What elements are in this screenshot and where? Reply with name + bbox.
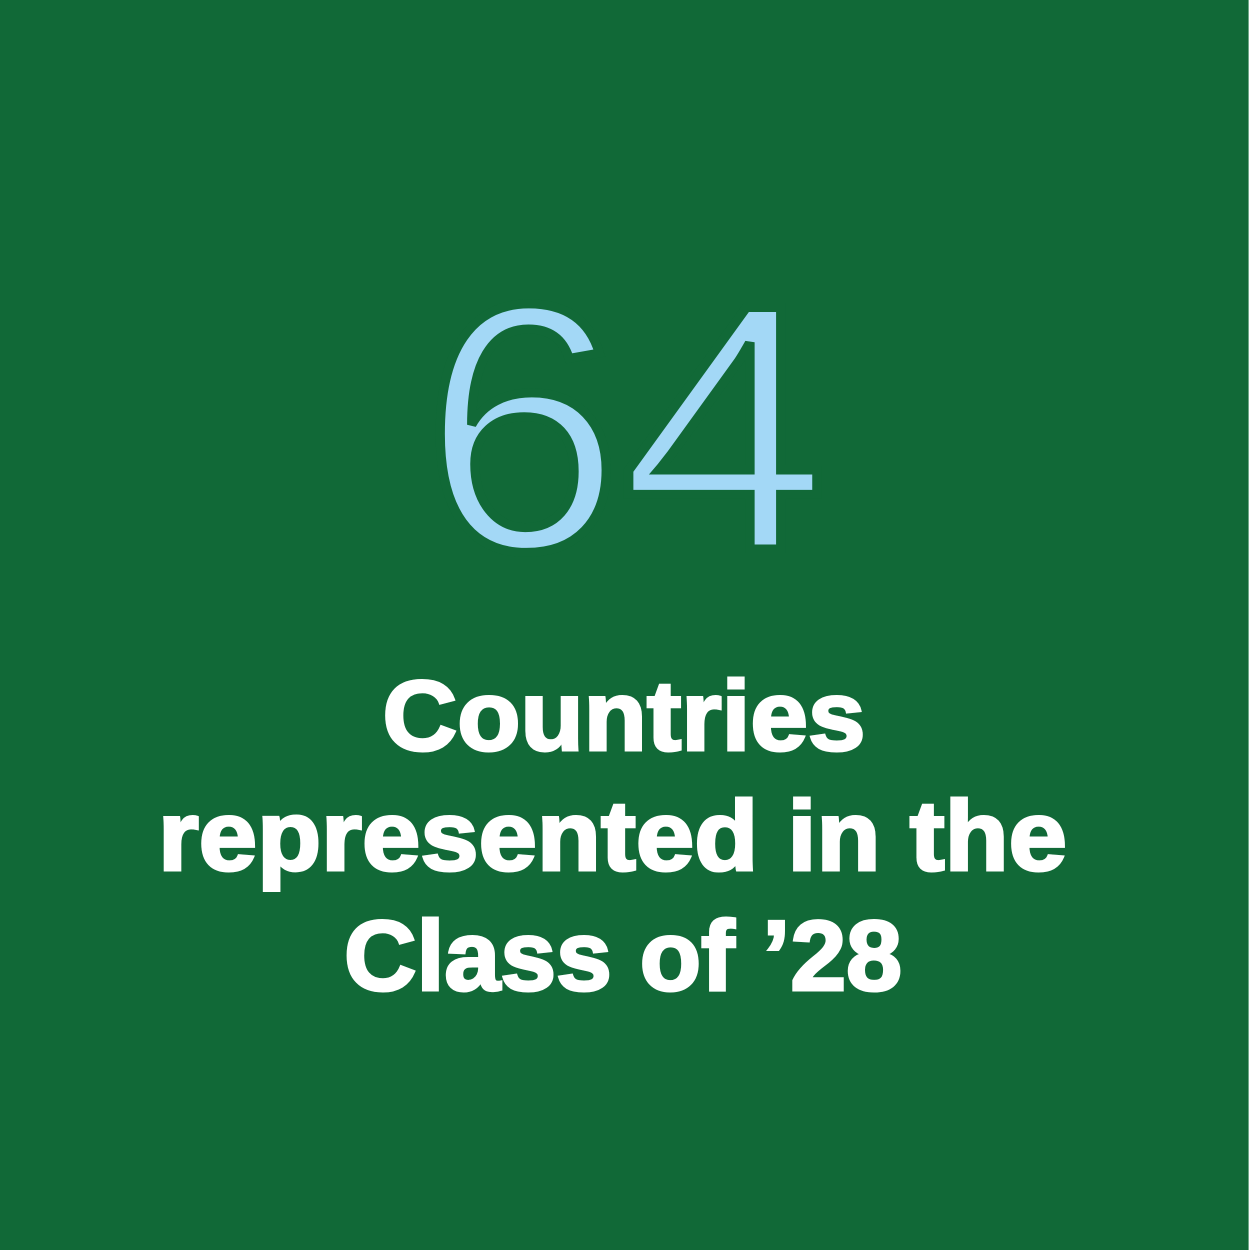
caption: countries represented: represented in the: [158, 780, 1067, 891]
caption: countries represented: Countries: [382, 660, 866, 771]
big number: 64: 6: [422, 232, 622, 624]
caption: countries represented: Class of ’28: [344, 900, 902, 1011]
big number: 64: [422, 232, 828, 624]
big number: 64: 4: [620, 232, 828, 624]
right edge sliver: [1248, 0, 1251, 1250]
caption: countries represented: [158, 660, 1067, 1011]
